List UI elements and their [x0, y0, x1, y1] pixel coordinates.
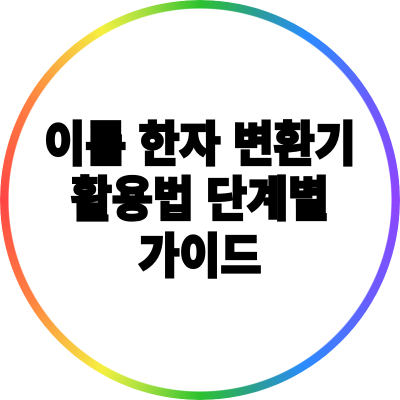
title: 이름 한자 변환기 [44, 119, 356, 172]
title: 활용법 단계별 [71, 174, 329, 227]
title: 가이드 [139, 231, 261, 284]
